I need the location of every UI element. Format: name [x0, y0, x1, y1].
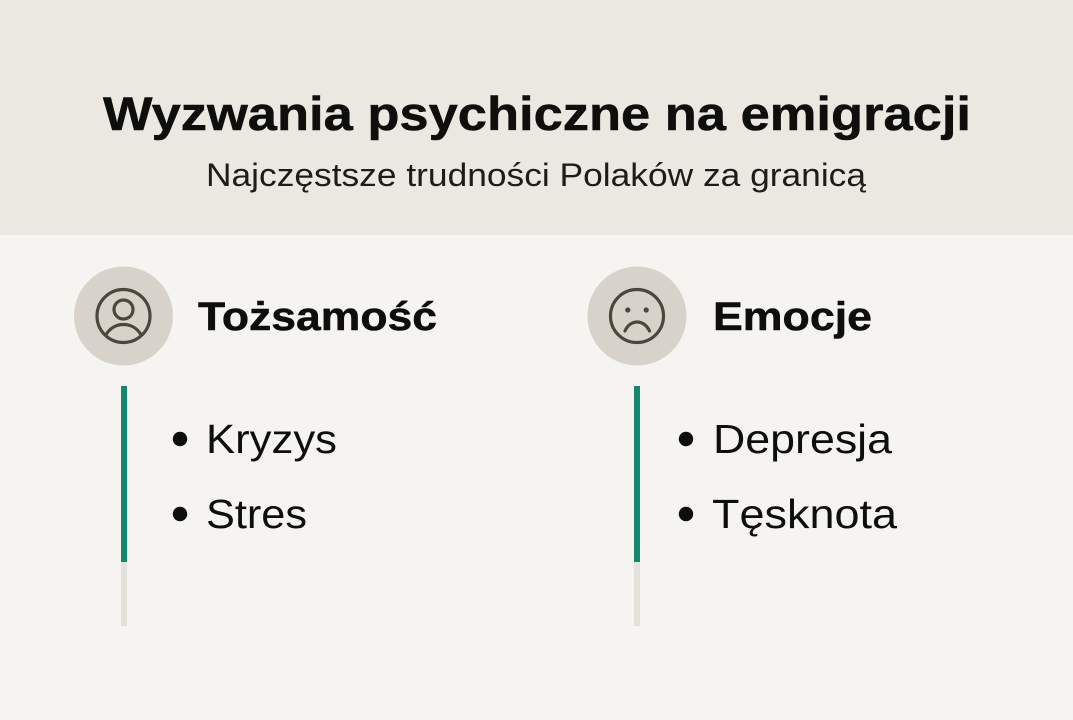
- panel: Emocje: [588, 266, 897, 626]
- timeline bar: [121, 386, 127, 626]
- timeline bar: [634, 386, 640, 626]
- icon: sad face in circle: [588, 266, 686, 366]
- list item: Depresja: Depresja: [713, 416, 892, 462]
- panel: Tożsamość: [74, 266, 437, 626]
- heading: Emocje: Emocje: [713, 295, 872, 339]
- heading: Tożsamość: Tożsamość: [198, 295, 437, 339]
- list item: Stres: Stres: [206, 491, 307, 537]
- subtitle: Najczęstsze trudności Polaków za granicą: [206, 157, 866, 193]
- list item: Tęsknota: Tęsknota: [712, 491, 897, 537]
- title: Wyzwania psychiczne na emigracji: [103, 87, 971, 140]
- list item: Kryzys: Kryzys: [206, 416, 337, 462]
- header band: [0, 0, 1073, 235]
- icon: person in circle: [74, 266, 173, 366]
